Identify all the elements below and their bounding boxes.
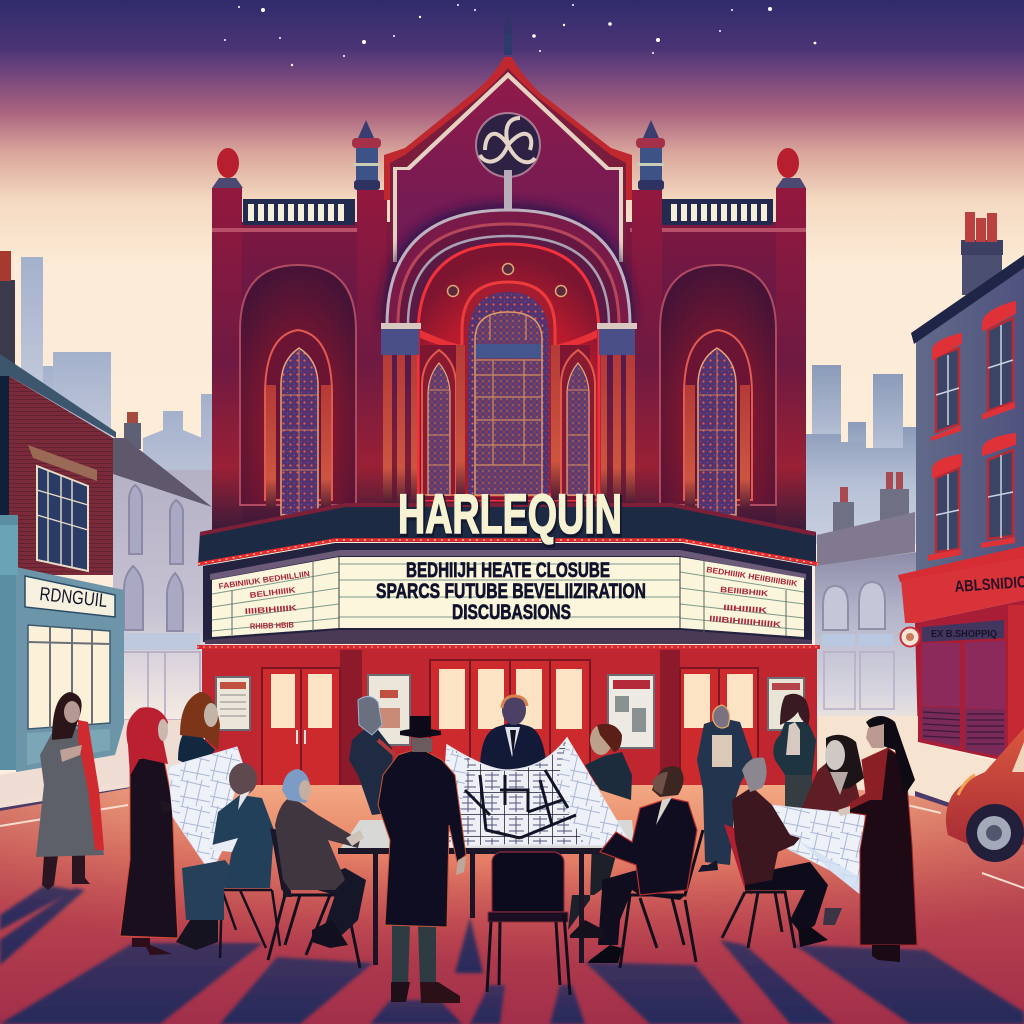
central arch — [381, 210, 637, 505]
man in hat standing from behind — [378, 716, 466, 1003]
main wall — [235, 222, 785, 542]
red notices left — [218, 569, 311, 631]
hooded person background left — [349, 696, 395, 815]
seated man right with glasses — [570, 766, 703, 968]
left turret — [352, 120, 387, 535]
centre window — [462, 282, 555, 495]
fascia: EX B.SHOPPIQ — [931, 629, 997, 640]
woman behind in brown hijab — [178, 692, 220, 770]
red notices left: IIIIBIHIIIIK — [245, 603, 297, 616]
shop window — [28, 625, 110, 729]
rosette — [476, 113, 540, 177]
right doors — [680, 668, 758, 786]
distant skyline right — [804, 365, 916, 544]
car — [946, 728, 1024, 862]
coat — [36, 725, 104, 857]
seated bald man left with map — [120, 692, 280, 958]
hand — [346, 830, 364, 846]
legs — [392, 925, 410, 985]
legs — [42, 855, 90, 890]
coat — [275, 797, 360, 890]
right map — [770, 805, 864, 897]
marquee frame — [203, 543, 812, 644]
centre doors — [430, 660, 590, 786]
road marks — [982, 873, 1024, 888]
white house left — [113, 412, 213, 720]
red notices right — [706, 565, 798, 629]
distant skyline left — [21, 257, 213, 524]
standing woman red scarf — [36, 692, 104, 890]
left arched bay — [240, 265, 356, 515]
columns — [383, 355, 635, 505]
head — [412, 738, 432, 752]
gable — [384, 57, 632, 262]
roof — [911, 255, 1024, 344]
hair — [866, 716, 915, 795]
lintel — [28, 445, 97, 481]
roof edge — [0, 354, 116, 438]
arched windows — [124, 485, 183, 631]
poster 3 — [608, 675, 654, 748]
chair — [268, 830, 360, 968]
left doors — [262, 668, 340, 786]
face — [866, 724, 884, 748]
legs — [300, 868, 366, 935]
red notices left: FABINIIUK BEDHILLIIN — [218, 569, 311, 591]
front chair centre — [487, 852, 570, 995]
roof — [113, 438, 212, 507]
shop sign — [25, 576, 115, 617]
poster 4 — [768, 678, 804, 730]
head — [652, 766, 684, 797]
red shop right upper building — [911, 212, 1024, 575]
red scarf — [78, 720, 104, 850]
left capital — [381, 323, 421, 355]
jacket — [732, 787, 800, 885]
central map — [440, 738, 631, 847]
windows — [928, 302, 1015, 561]
legs — [182, 860, 240, 920]
right tower — [776, 148, 806, 538]
arch shadow — [386, 208, 630, 325]
red notices left: BELIHIIIIK — [249, 585, 296, 600]
red notices right: BEIIIBHIIK — [720, 585, 769, 598]
chimney — [961, 212, 1003, 295]
marquee board centre with headline: DISCUBASIONS — [452, 601, 571, 624]
red shop right front — [898, 546, 1024, 765]
background woman with dark hood — [800, 735, 864, 925]
roof — [817, 512, 915, 566]
medallions — [448, 264, 566, 296]
wall — [815, 552, 917, 740]
chair — [220, 890, 280, 958]
standing woman dark hair right — [838, 716, 917, 962]
marquee canopy — [198, 503, 818, 566]
cast shadows on ground — [0, 885, 1024, 1024]
hat — [410, 716, 431, 730]
seated woman blue hijab — [268, 769, 366, 968]
harlequin title sign — [398, 482, 623, 547]
arched windows — [823, 582, 885, 630]
brick building left — [0, 251, 116, 575]
head — [229, 763, 257, 795]
street — [0, 785, 1024, 1024]
hanging sign — [900, 628, 920, 646]
central standing man — [480, 695, 547, 770]
window — [37, 466, 88, 571]
pavement right — [817, 716, 1024, 830]
chair — [620, 830, 703, 968]
shoes — [872, 945, 900, 962]
right turret — [632, 120, 665, 535]
left balustrade — [212, 199, 387, 232]
marquee board centre with headline: SPARCS FUTUBE BEVELIIZIRATION — [376, 580, 646, 603]
theatre lower facade — [197, 646, 820, 788]
marquee board left — [212, 557, 339, 637]
lower arcade — [420, 345, 590, 500]
chimney — [0, 251, 15, 365]
pavement left — [0, 720, 205, 813]
background standing man right — [697, 705, 753, 872]
woman red hijab standing — [120, 707, 180, 955]
harlequin title sign: HARLEQUIN — [399, 484, 623, 547]
shoes — [391, 982, 410, 1002]
chimneys — [833, 472, 909, 534]
coat — [378, 748, 466, 927]
stars — [224, 4, 816, 66]
wall — [916, 262, 1024, 575]
teal shop left — [0, 515, 124, 772]
king post — [504, 170, 512, 242]
wheel — [966, 804, 1024, 862]
house right — [815, 472, 917, 740]
shop sign: RDNGUIL — [38, 584, 108, 612]
chase lights upper — [198, 540, 818, 564]
left lancet — [422, 350, 456, 495]
red notices right: BEDHIIIIK HEIIBIIIIBIIK — [706, 565, 798, 588]
marquee board centre with headline: BEDHIIJH HEATE CLOSUBE — [406, 559, 610, 582]
right balustrade — [630, 199, 806, 232]
jacket — [600, 798, 697, 895]
red notices right: IIIHIIIIIK — [723, 603, 768, 615]
marquee board centre with headline — [339, 557, 680, 628]
marquee board right — [680, 557, 804, 637]
poster 1 — [216, 677, 250, 730]
hijab — [282, 769, 310, 803]
lights lower — [197, 645, 820, 649]
spire — [503, 7, 513, 55]
jacket — [212, 795, 274, 888]
right lancet — [561, 350, 595, 495]
shutters — [922, 641, 1005, 757]
seated person behind table right — [568, 724, 632, 930]
fascia — [922, 620, 1004, 642]
background woman right — [773, 694, 816, 808]
dress — [845, 748, 917, 945]
poster 2 — [368, 675, 410, 745]
hand — [838, 806, 850, 816]
red notices left: RHIBB HBIB — [250, 620, 294, 631]
left tower — [212, 148, 243, 538]
legs — [598, 868, 685, 945]
head — [742, 758, 767, 792]
harlequin title sign: HARLEQUIN — [398, 482, 622, 545]
red notices right: IIIIBIHIIIIHIIIIK — [709, 614, 782, 629]
seated man right with red chair and map — [722, 758, 864, 948]
hair — [52, 692, 82, 740]
chimney — [124, 412, 141, 449]
left map — [168, 747, 243, 873]
right arched bay — [660, 265, 776, 515]
table — [338, 820, 636, 965]
sky background — [0, 0, 1024, 800]
right capital — [597, 323, 637, 355]
legs — [745, 862, 828, 935]
red chair — [724, 824, 752, 895]
